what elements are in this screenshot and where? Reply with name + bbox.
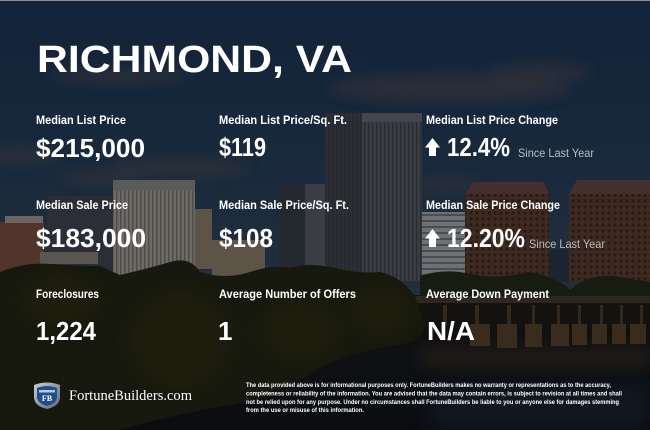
stat: median sale price: $183,000 (36, 223, 146, 253)
stat: median list price change: 12.4% (447, 132, 510, 162)
stat: average down payment (426, 287, 549, 346)
disclaimer: completeness or reliability of the information. You are advised that the data may contain errors, is subject to revision at all times and shall (246, 390, 622, 398)
stat: median list price change: Median List Price Change (426, 113, 558, 127)
stat: foreclosures: 1,224 (36, 316, 96, 346)
stat: median list price per square foot: Median List Price/Sq. Ft. (219, 113, 347, 127)
background: tree line (0, 260, 422, 430)
background: far trees (420, 271, 650, 300)
icon: up arrow (425, 138, 440, 156)
stat: average down payment: Average Down Payment (426, 287, 549, 301)
stat: average number of offers (218, 287, 356, 346)
stat: average number of offers: Average Number of Offers (219, 287, 356, 301)
background: skyline buildings (0, 113, 650, 282)
stat: average down payment: N/A (427, 316, 475, 346)
stat: median list price change (425, 113, 594, 162)
stat: median sale price: Median Sale Price (36, 198, 128, 212)
stat: foreclosures (36, 287, 99, 346)
stat: median list price change: Since Last Year (518, 146, 594, 160)
disclaimer: not be relied upon for any purpose. Under no circumstances shall FortuneBuilders be liable to you or anyone else for damages stemming (246, 399, 619, 406)
stat: median list price: Median List Price (36, 113, 126, 127)
stat: median sale price change (425, 198, 605, 253)
stat: median sale price per square foot: $108 (219, 223, 273, 253)
logo: FortuneBuilders (34, 382, 193, 409)
icon: up arrow (425, 229, 440, 247)
stat: median list price (36, 113, 145, 163)
wordmark: FortuneBuilders.com (69, 388, 193, 404)
stat: median sale price change: Median Sale Price Change (426, 198, 560, 212)
stat: median sale price change: Since Last Year (529, 237, 605, 251)
icon: shield: FB (42, 394, 53, 403)
background: clouds (0, 64, 590, 191)
icon: shield (34, 382, 60, 409)
stat: median list price per square foot (219, 113, 347, 162)
stat: median list price per square foot: $119 (219, 132, 266, 162)
background: bridge (400, 296, 650, 348)
stat: median sale price change: 12.20% (447, 223, 525, 253)
stat: median list price: $215,000 (36, 133, 145, 163)
stat: foreclosures: Foreclosures (36, 287, 99, 301)
disclaimer: from the use or misuse of this information. (246, 407, 364, 414)
top edge line (0, 0, 650, 1)
stat: median sale price per square foot: Median Sale Price/Sq. Ft. (219, 198, 349, 212)
disclaimer: The data provided above is for informational purposes only. FortuneBuilders makes no warranty or representations as to the accuracy, (246, 382, 611, 389)
title: RICHMOND, VA (37, 39, 352, 81)
disclaimer (246, 382, 622, 414)
stat: median sale price per square foot (219, 198, 349, 253)
background: river (100, 295, 650, 430)
stat: median sale price (36, 198, 146, 253)
stat: average number of offers: 1 (218, 316, 232, 346)
background: sky (0, 0, 650, 300)
